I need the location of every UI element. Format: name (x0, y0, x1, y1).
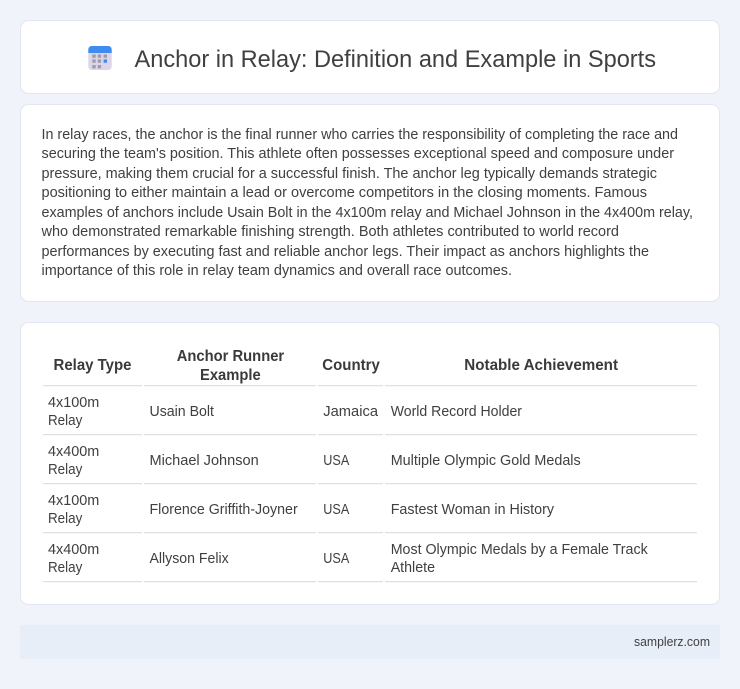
footer text: samplerz.com (634, 635, 710, 649)
text block: description (40, 127, 693, 279)
panel: description card (20, 104, 720, 302)
table header: Example (200, 367, 261, 384)
table row: Allyson Felix: Relay (48, 560, 83, 576)
table row: Florence Griffith-Joyner: USA (323, 502, 350, 518)
panel: title card (20, 20, 720, 94)
table row: Allyson Felix (48, 542, 648, 576)
table row: Michael Johnson: Relay (48, 462, 83, 478)
table row: Michael Johnson: USA (323, 453, 350, 469)
table header: Notable Achievement (464, 357, 619, 374)
table row: Michael Johnson: Michael Johnson (150, 453, 259, 469)
table row: Michael Johnson (48, 444, 581, 478)
table row: Usain Bolt: Jamaica (323, 404, 378, 420)
footer bar (20, 625, 720, 659)
table row: Usain Bolt: Relay (48, 413, 83, 429)
text block: description: examples of anchors include Usain Bolt in the 4x100m relay and Michael Johnson in the 4x400m relay, (42, 205, 693, 221)
text block: description: performances by executing fast and reliable anchor legs. Their impact as anchors highlights the (42, 244, 649, 260)
table row: Usain Bolt: World Record Holder (391, 404, 522, 420)
table header (54, 348, 619, 384)
table row: Allyson Felix: USA (323, 551, 350, 567)
table row: Florence Griffith-Joyner: Relay (48, 511, 83, 527)
table row: Usain Bolt: Usain Bolt (150, 404, 214, 420)
title: Anchor in Relay: Definition and Example in Sports (134, 46, 656, 73)
text block: description: In relay races, the anchor is the final runner who carries the responsibility of completing the race and (42, 127, 678, 143)
table header: Relay Type (54, 357, 132, 374)
table row: Allyson Felix: Allyson Felix (150, 551, 229, 567)
table row: Allyson Felix: Most Olympic Medals by a Female Track (391, 542, 648, 558)
table row: Michael Johnson: 4x400m (48, 444, 99, 460)
text block: description: importance of this role in relay team dynamics and overall race outcomes. (42, 263, 512, 279)
table header: Anchor Runner (177, 348, 284, 365)
table row: Florence Griffith-Joyner: 4x100m (48, 493, 99, 509)
table row: Allyson Felix: Athlete (391, 560, 435, 576)
icon: calendar (88, 46, 112, 70)
table row: Usain Bolt (48, 395, 522, 429)
table row: Florence Griffith-Joyner (48, 493, 555, 527)
panel: table card (20, 322, 720, 604)
table header: Country (322, 357, 380, 374)
table row: Florence Griffith-Joyner: Florence Griffith-Joyner (150, 502, 298, 518)
table row: Allyson Felix: 4x400m (48, 542, 99, 558)
table row: Florence Griffith-Joyner: Fastest Woman in History (391, 502, 555, 518)
text block: description: who demonstrated remarkable finishing strength. Both athletes contributed to world record (40, 224, 619, 240)
table row: Usain Bolt: 4x100m (48, 395, 99, 411)
table row: Michael Johnson: Multiple Olympic Gold Medals (391, 453, 581, 469)
text block: description: positioning to either maintain a lead or overcome competitors in the closing moments. Famous (42, 185, 647, 201)
text block: description: pressure, making them crucial for a successful finish. The anchor leg typically demands strategic (42, 166, 657, 182)
text block: description: securing the team's position. This athlete often possesses exceptional speed and composure under (42, 146, 674, 162)
